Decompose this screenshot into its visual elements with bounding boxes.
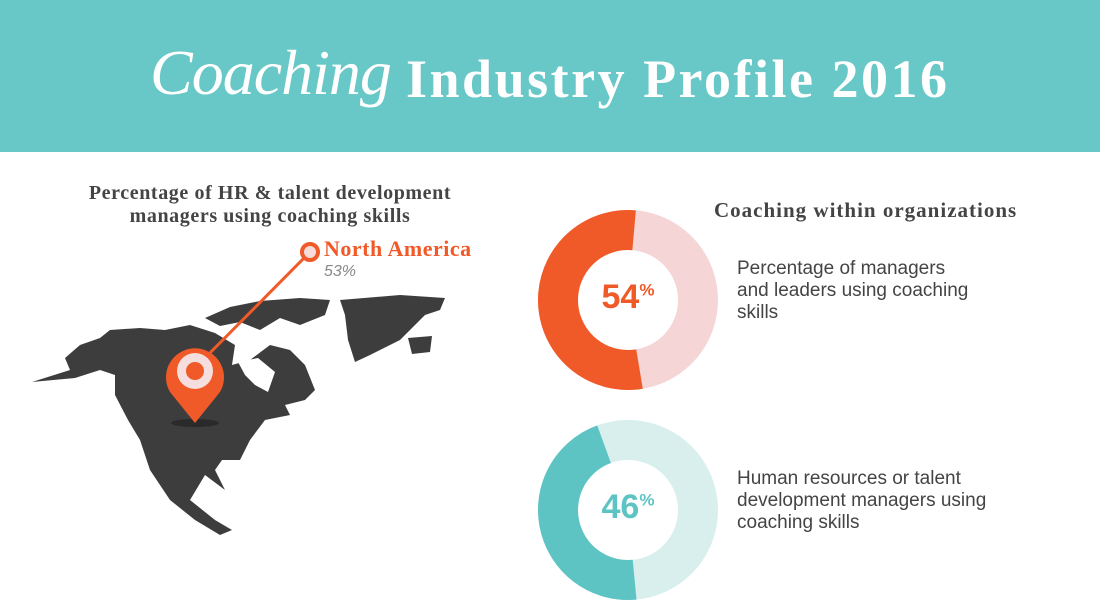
donut chart 54% — [538, 210, 718, 390]
title: Industry Profile 2016 — [406, 49, 950, 109]
title: Coaching — [150, 37, 391, 108]
description 54% — [737, 258, 968, 323]
map heading — [89, 182, 451, 227]
donut chart 54%: 54% — [602, 278, 654, 316]
map heading: Percentage of HR & talent development — [89, 182, 451, 204]
section heading: Coaching within organizations — [714, 198, 1017, 222]
map of north america — [32, 242, 445, 535]
description 54%: and leaders using coaching — [737, 280, 968, 301]
donut chart 46% — [538, 420, 718, 600]
donut chart 46%: 46% — [602, 488, 654, 526]
map pin and connector — [166, 244, 318, 427]
description 46%: coaching skills — [737, 512, 860, 533]
header banner — [0, 0, 1100, 152]
title — [150, 37, 950, 109]
map heading: managers using coaching skills — [130, 205, 410, 227]
region label: North America — [324, 236, 472, 261]
region value: 53% — [324, 263, 356, 280]
description 46%: development managers using — [737, 490, 986, 511]
description 54%: skills — [737, 302, 778, 323]
description 46% — [737, 468, 986, 533]
description 54%: Percentage of managers — [737, 258, 945, 279]
description 46%: Human resources or talent — [737, 468, 961, 489]
